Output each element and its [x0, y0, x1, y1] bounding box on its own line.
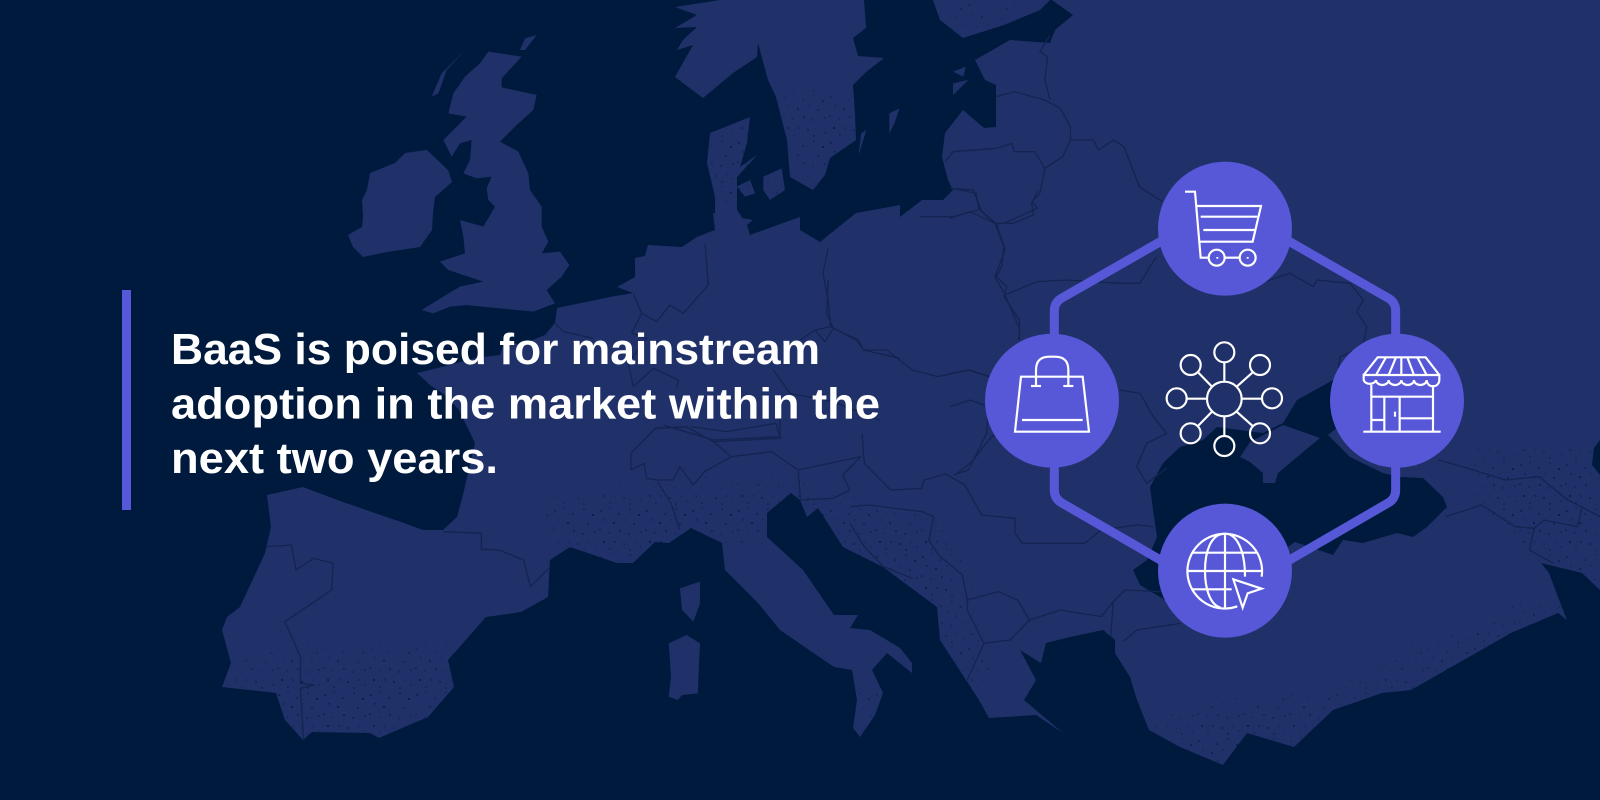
icon: storefront — [1363, 357, 1441, 432]
landmass: Baltic islands — [859, 67, 968, 155]
country borders — [267, 35, 1600, 740]
icon: shopping bag — [1015, 357, 1089, 432]
node circle: left — [985, 334, 1119, 468]
landmass: Great Britain — [422, 52, 569, 313]
landmass: Danish islands — [737, 168, 785, 200]
headline text — [171, 325, 880, 483]
headline text: next two years. — [171, 434, 498, 483]
node circle: right — [1330, 334, 1464, 468]
Caspian Sea edge — [1592, 440, 1600, 475]
accent bar — [122, 290, 131, 510]
hexagon network diagram — [985, 162, 1464, 638]
landmass: Scandinavia — [675, 0, 884, 190]
headline text: BaaS is poised for mainstream — [171, 325, 820, 374]
icon: central network hub — [1167, 342, 1282, 456]
landmass: Corsica and Sardinia — [669, 582, 700, 700]
landmass: Ireland — [348, 150, 452, 257]
node circle: top — [1158, 162, 1292, 296]
node circle: bottom — [1158, 504, 1292, 638]
Black Sea and Sea of Azov — [1133, 380, 1447, 600]
landmass: Denmark — [707, 117, 757, 232]
landmass: Finland — [933, 0, 1050, 38]
headline text: adoption in the market within the — [171, 380, 880, 428]
Crimea — [1240, 425, 1320, 483]
hexagon connector — [1054, 205, 1396, 597]
icon: globe with cursor — [1187, 534, 1262, 609]
landmass: Scottish islands — [432, 35, 537, 97]
icon: shopping cart — [1185, 192, 1261, 266]
